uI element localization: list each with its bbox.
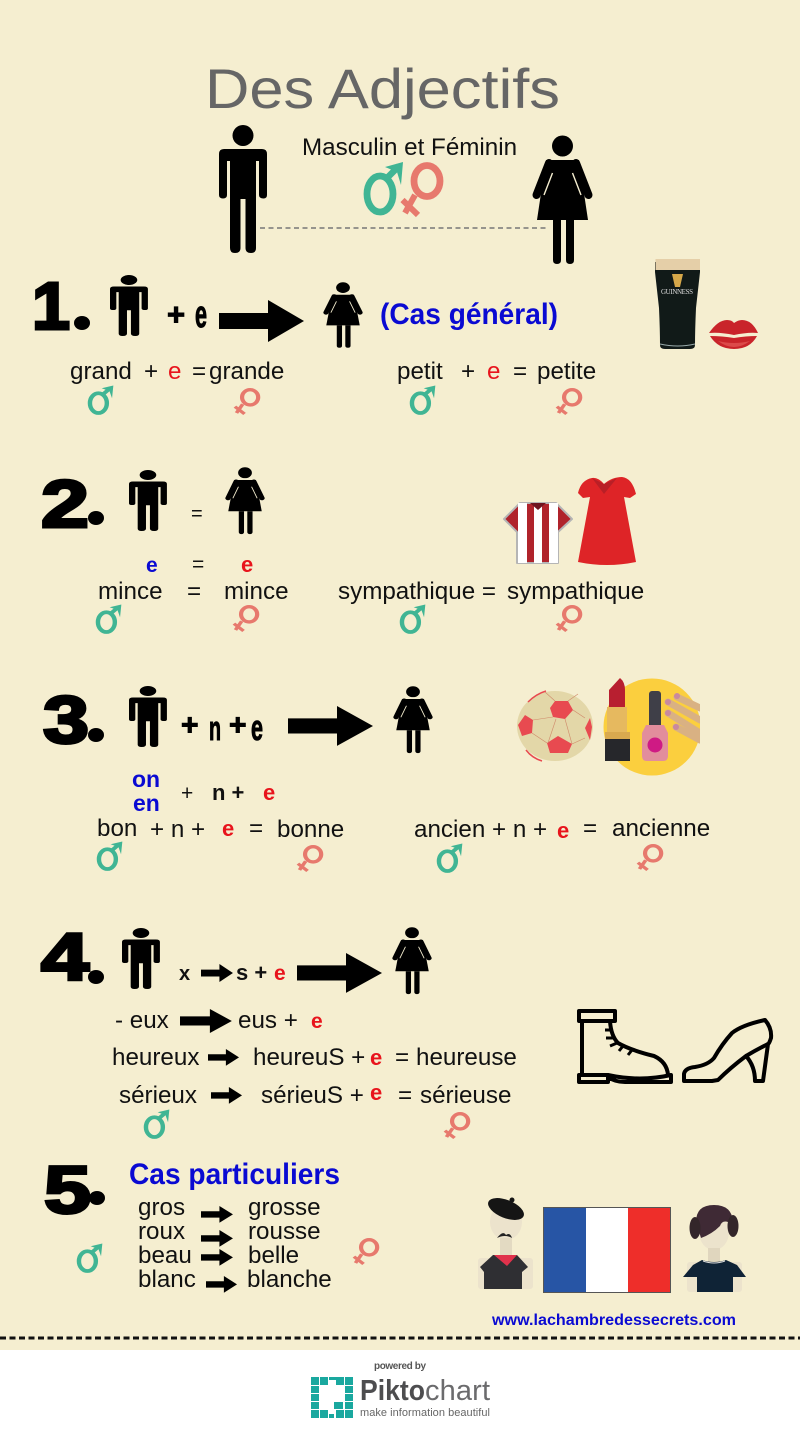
powered by: powered by xyxy=(374,1361,426,1372)
icon: woman with earmuffs xyxy=(683,1205,746,1292)
icon: woman xyxy=(228,467,262,534)
list: irregular adjectives: belle xyxy=(248,1242,299,1269)
rule line: e xyxy=(241,552,253,577)
number 4 xyxy=(41,920,104,995)
tagline: make information beautiful xyxy=(360,1407,490,1419)
number 5 xyxy=(44,1153,105,1228)
line: heureux: heureux xyxy=(112,1044,199,1071)
example: sympathique: sympathique = xyxy=(338,578,496,605)
section 4 xyxy=(41,920,771,1138)
icon: man xyxy=(110,275,148,336)
rule: x to s plus e: e xyxy=(274,962,286,985)
icon: woman xyxy=(326,282,360,348)
example: ancien xyxy=(414,815,710,871)
number 1: 1 xyxy=(32,269,70,344)
wordmark: Pikto xyxy=(360,1375,425,1407)
website url: www.lachambredessecrets.com xyxy=(491,1312,736,1329)
equals sign: = xyxy=(191,503,203,525)
list: irregular adjectives: beau xyxy=(138,1242,192,1269)
number 3: 3 xyxy=(43,683,89,758)
line: heureux: = xyxy=(395,1044,409,1071)
icon: nail polish circle xyxy=(604,678,700,776)
example: grand: e xyxy=(168,358,181,385)
number 5: 5 xyxy=(44,1153,91,1228)
example: bon: e xyxy=(222,816,234,841)
arrow xyxy=(297,953,382,993)
rule: x to s plus e: s + xyxy=(236,960,267,985)
list: irregular adjectives: blanche xyxy=(247,1266,332,1293)
rule: x to s plus e xyxy=(179,960,286,985)
example: grand: = xyxy=(192,358,206,385)
example: ancien: ancienne xyxy=(612,815,710,842)
line: serieux: sérieuse xyxy=(420,1082,511,1109)
rule: plus n plus e: e xyxy=(251,707,263,748)
icon: football xyxy=(517,691,593,761)
list: irregular adjectives: grosse xyxy=(248,1194,321,1221)
arrow xyxy=(219,300,304,342)
icon: man xyxy=(129,470,167,531)
rule line: on en: n + xyxy=(212,780,244,805)
rule line: on en: + xyxy=(181,782,193,805)
line: eux to eus xyxy=(115,1007,323,1034)
icon: high heel xyxy=(684,1020,771,1081)
wordmark xyxy=(360,1375,490,1407)
icon: man xyxy=(129,686,167,747)
example: mince xyxy=(98,578,289,632)
line: eux to eus: - eux xyxy=(115,1007,169,1034)
example: grand: grand xyxy=(70,358,132,385)
bottom dashed divider xyxy=(0,1336,800,1340)
section 5 xyxy=(44,1153,746,1329)
icon: woman xyxy=(396,686,430,753)
icon: french flag xyxy=(543,1207,671,1293)
example: bon: bon xyxy=(97,815,137,842)
rule line: e xyxy=(146,554,158,577)
icon: lips xyxy=(709,320,758,349)
icon: male and female symbols xyxy=(367,162,440,215)
line: eux to eus: eus + xyxy=(238,1007,298,1034)
example: bon: + n + xyxy=(150,816,205,843)
section 1 xyxy=(32,259,758,414)
wordmark: chart xyxy=(425,1375,490,1407)
list: irregular adjectives: roux xyxy=(138,1218,185,1245)
example: petit: petite xyxy=(537,358,596,385)
example: petit: = xyxy=(513,358,527,385)
example: grand: + xyxy=(144,358,158,385)
title: Des Adjectifs xyxy=(205,57,560,120)
number 3 xyxy=(43,683,104,758)
line: heureux: heureuS + xyxy=(253,1044,365,1071)
rule line: on en: en xyxy=(133,790,160,816)
line: serieux: sérieuS + xyxy=(261,1082,364,1109)
icon: striped shirt xyxy=(504,503,572,563)
icon: man xyxy=(122,928,160,989)
icon: logo squares xyxy=(311,1377,353,1418)
heading: cas particuliers: Cas particuliers xyxy=(129,1158,340,1191)
example: petit: petit xyxy=(397,358,443,385)
example: petit: + xyxy=(461,358,475,385)
rule: plus n plus e: n xyxy=(209,710,221,748)
rule line: on en: on xyxy=(132,766,160,792)
rule line: = xyxy=(192,553,204,576)
line: heureux: e xyxy=(370,1045,382,1070)
line: serieux: = xyxy=(398,1082,412,1109)
icon: woman xyxy=(395,927,429,994)
example: ancien: ancien + n + xyxy=(414,816,547,843)
number 4: 4 xyxy=(41,920,89,995)
example: petit: e xyxy=(487,358,500,385)
rule: x to s plus e: x xyxy=(179,963,190,985)
icon: lipstick xyxy=(605,678,630,761)
example: mince: = xyxy=(187,578,201,605)
gender symbols xyxy=(146,1110,468,1138)
footer: piktochart logo xyxy=(311,1361,490,1419)
example: bon xyxy=(97,815,344,871)
list: irregular adjectives xyxy=(138,1194,332,1293)
rule: plus e xyxy=(167,294,207,336)
rule line: on en xyxy=(132,766,275,816)
gender symbols xyxy=(79,1240,377,1271)
line: heureux: heureuse xyxy=(416,1044,517,1071)
line: serieux: e xyxy=(370,1080,382,1105)
icon: man with beret xyxy=(478,1194,533,1289)
rule line xyxy=(146,552,253,577)
example: petit xyxy=(397,358,596,414)
example: grand xyxy=(70,358,284,414)
line: heureux xyxy=(112,1044,517,1071)
icon: guinness glass xyxy=(655,259,700,349)
rule: plus e: e xyxy=(195,294,207,336)
list: irregular adjectives: rousse xyxy=(248,1218,321,1245)
rule: plus e: + xyxy=(167,297,185,332)
rule: plus n plus e: + xyxy=(181,709,199,742)
icon: red dress xyxy=(578,477,636,565)
number 2: 2 xyxy=(41,467,89,542)
heading: cas general: (Cas général) xyxy=(380,298,558,331)
list: irregular adjectives: blanc xyxy=(138,1266,196,1293)
example: mince: mince xyxy=(98,578,163,605)
example: sympathique: sympathique xyxy=(507,578,644,605)
icon: boot xyxy=(579,1011,671,1082)
example: ancien: e xyxy=(557,818,569,843)
example: mince: mince xyxy=(224,578,289,605)
example: bon: bonne xyxy=(277,816,344,843)
section 3 xyxy=(43,678,710,871)
icon: large man xyxy=(219,125,267,253)
example: bon: = xyxy=(249,815,263,842)
list: irregular adjectives: gros xyxy=(138,1194,185,1221)
rule line: on en: e xyxy=(263,780,275,805)
number 2 xyxy=(41,467,104,542)
rule: plus n plus e xyxy=(181,707,263,748)
icon: guinness glass: GUINNESS xyxy=(661,288,693,296)
rule: plus n plus e: + xyxy=(229,709,247,742)
line: serieux xyxy=(119,1080,511,1109)
example: ancien: = xyxy=(583,815,597,842)
section 2 xyxy=(41,467,644,632)
line: serieux: sérieux xyxy=(119,1082,197,1109)
line: eux to eus: e xyxy=(311,1010,323,1033)
icon: large woman xyxy=(536,136,588,264)
example: grand: grande xyxy=(209,358,284,385)
number 1 xyxy=(32,269,90,344)
arrow xyxy=(288,706,373,746)
example: sympathique xyxy=(338,578,644,632)
subtitle: Masculin et Féminin xyxy=(302,134,517,161)
